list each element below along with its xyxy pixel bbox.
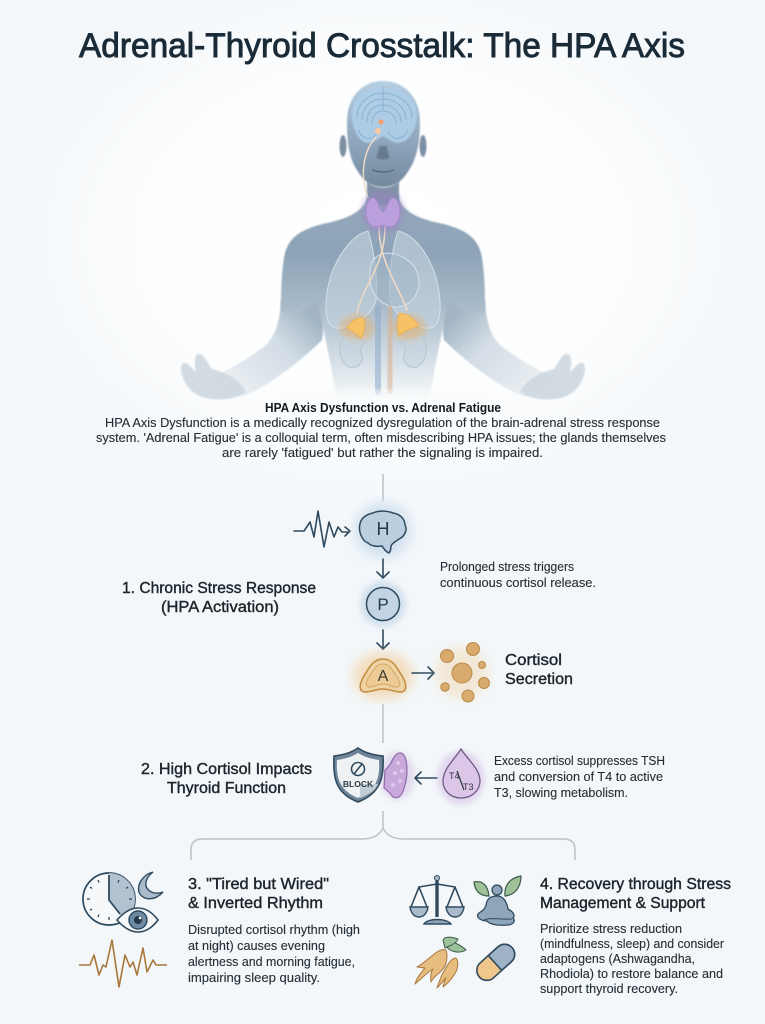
- fade at base of figure: [263, 392, 503, 424]
- icon: eye: [117, 908, 158, 932]
- intro text block: system. 'Adrenal Fatigue' is a colloquial term, often misdescribing HPA issues; the glands themselves: [96, 430, 666, 445]
- step 2 description: [494, 753, 665, 800]
- heading: 3. "Tired but Wired": [188, 876, 329, 893]
- right hand: [520, 354, 585, 400]
- icon: moon: [139, 872, 163, 899]
- step 1 heading: [122, 580, 316, 616]
- step 2 description: and conversion of T4 to active: [494, 769, 663, 784]
- heading: Management & Support: [540, 895, 706, 912]
- heading: 4. Recovery through Stress: [540, 876, 731, 893]
- icon: pituitary P: [360, 581, 406, 627]
- description: at night) causes evening: [188, 938, 325, 953]
- heading: & Inverted Rhythm: [188, 895, 323, 912]
- intro text block: HPA Axis Dysfunction is a medically recognized dysregulation of the brain-adrenal stress response: [105, 415, 660, 430]
- connector lines: [191, 474, 575, 860]
- panel: recovery: [410, 876, 731, 996]
- description: support thyroid recovery.: [540, 981, 678, 996]
- icon: meditation and leaves: [474, 876, 521, 925]
- icon: block shield: [334, 748, 383, 802]
- step 1 heading: (HPA Activation): [161, 599, 279, 616]
- cortisol secretion label: Cortisol: [505, 652, 562, 669]
- anatomical figure: [181, 81, 585, 424]
- icon: T4/T3 drop: [437, 749, 485, 805]
- heading: [188, 876, 329, 912]
- step 2 description: T3, slowing metabolism.: [494, 785, 628, 800]
- icon: stress pulse and hypothalamus brain: H: [376, 519, 390, 539]
- icon: clock: [83, 873, 135, 925]
- description: [188, 922, 360, 985]
- icon: stress pulse and hypothalamus brain: [294, 502, 411, 558]
- description: adaptogens (Ashwagandha,: [540, 951, 695, 966]
- description: (mindfulness, sleep) and consider: [540, 936, 725, 951]
- step 2 description: Excess cortisol suppresses TSH: [494, 753, 665, 768]
- description: Rhodiola) to restore balance and: [540, 966, 723, 981]
- arrow: P to A: [377, 630, 389, 649]
- icon: capsule: [473, 940, 519, 984]
- step 1 heading: 1. Chronic Stress Response: [122, 580, 316, 597]
- step 1 description: [440, 559, 596, 590]
- arrow: A to cortisol: [412, 667, 434, 679]
- step 1 description: continuous cortisol release.: [440, 575, 596, 590]
- description: alertness and morning fatigue,: [188, 954, 355, 969]
- title: Adrenal-Thyroid Crosstalk: The HPA Axis: [79, 27, 685, 65]
- spine and vessels: [357, 137, 407, 392]
- face: [377, 146, 389, 160]
- icon: balance scale: [410, 876, 464, 924]
- intro text block: HPA Axis Dysfunction vs. Adrenal Fatigue: [265, 401, 501, 415]
- icon: T4/T3 drop: T4: [449, 771, 460, 781]
- icon: ginseng root: [415, 937, 466, 988]
- description: Prioritize stress reduction: [540, 921, 682, 936]
- icon: block shield: BLOCK: [343, 779, 374, 789]
- thyroid gland: [361, 190, 405, 234]
- heart: [370, 253, 419, 307]
- left forearm: [212, 280, 324, 396]
- description: Disrupted cortisol rhythm (high: [188, 922, 360, 937]
- left hand: [181, 354, 246, 400]
- icon: pituitary P: P: [377, 595, 389, 614]
- description: [540, 921, 725, 996]
- arrow: hormone to thyroid: [415, 772, 437, 784]
- step 1 description: Prolonged stress triggers: [440, 559, 574, 574]
- description: impairing sleep quality.: [188, 970, 320, 985]
- cortisol secretion label: [505, 652, 573, 688]
- right forearm: [442, 280, 554, 396]
- step 2 heading: [141, 761, 312, 797]
- arrow: H to P: [377, 559, 389, 578]
- cortisol secretion label: Secretion: [505, 671, 573, 688]
- panel: tired but wired: [79, 872, 360, 987]
- neck: [367, 180, 399, 205]
- icon: adrenal A: A: [378, 668, 389, 685]
- icon: T4/T3 drop: T3: [463, 782, 474, 792]
- intro text block: [96, 401, 666, 460]
- brain: [352, 87, 417, 143]
- body silhouette: [281, 195, 485, 404]
- heading: [540, 876, 731, 912]
- step 2 heading: 2. High Cortisol Impacts: [141, 761, 312, 778]
- head: [340, 81, 426, 205]
- icon: irregular rhythm: [79, 940, 167, 987]
- adrenal glands and kidneys: [340, 313, 426, 367]
- lungs: [326, 231, 440, 328]
- intro text block: are rarely 'fatigued' but rather the signaling is impaired.: [222, 445, 543, 460]
- icon: thyroid half: [379, 752, 415, 800]
- icon: cortisol particles: [436, 642, 490, 702]
- step 2 heading: Thyroid Function: [167, 780, 286, 797]
- icon: adrenal A: [353, 652, 413, 700]
